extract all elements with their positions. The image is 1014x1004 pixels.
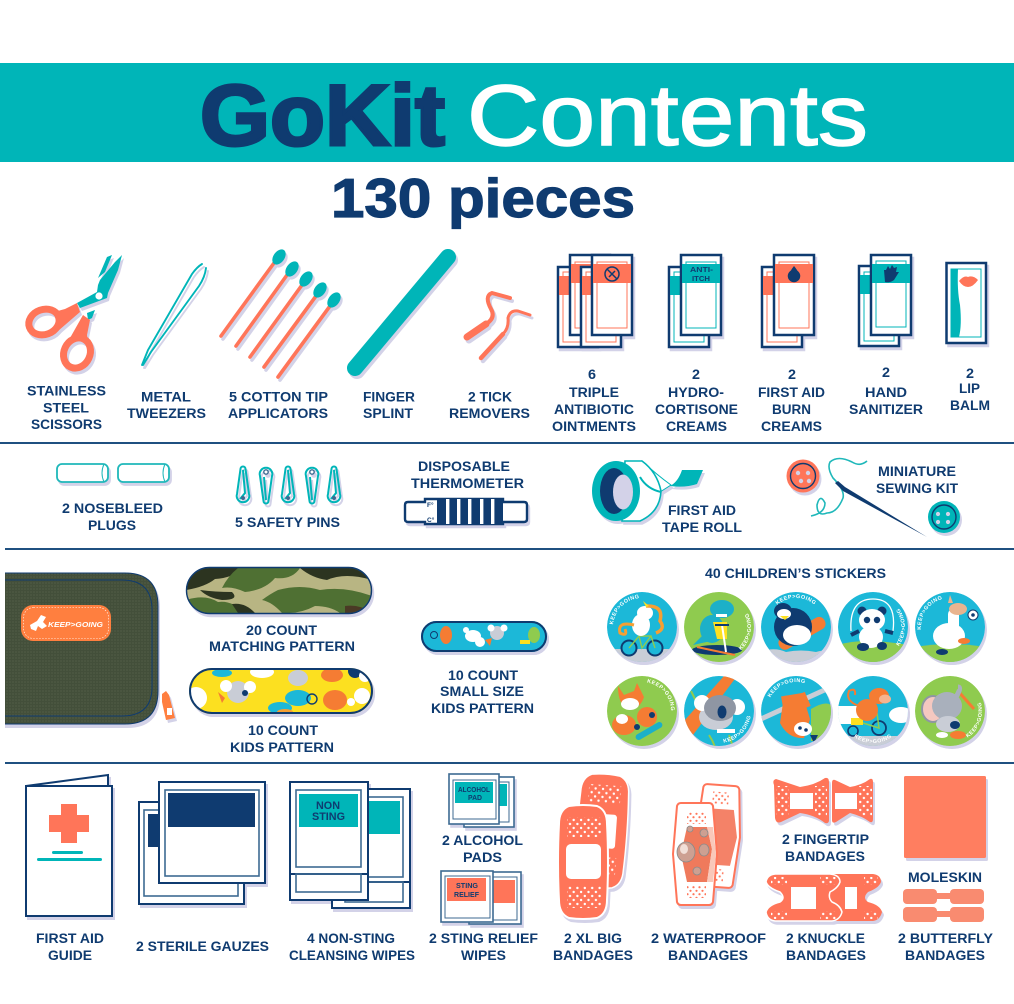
label: stainless steel scissors: STAINLESS: [27, 384, 106, 398]
label: first aid tape roll: FIRST AID: [668, 503, 736, 518]
label: nosebleed plugs: [62, 501, 163, 533]
label: miniature sewing kit: SEWING KIT: [876, 481, 959, 496]
label: triple antibiotic ointments: TRIPLE: [569, 385, 619, 400]
label: first aid burn creams: BURN: [772, 402, 811, 417]
label: matching pattern: [209, 623, 355, 654]
label: kids pattern: KIDS PATTERN: [230, 740, 334, 755]
label: sting relief wipes: WIPES: [461, 948, 506, 963]
label: lip balm: LIP: [959, 381, 980, 396]
panel: zippered kit bag: [5, 573, 175, 728]
icon: non-sting cleansing wipes: STING: [312, 811, 345, 823]
icon: finger splint: [355, 257, 448, 368]
icon: non-sting cleansing wipes: NON: [316, 800, 340, 812]
label: butterfly bandages: 2 BUTTERFLY: [898, 931, 993, 946]
label: finger splint: [363, 390, 415, 421]
label: disposable thermometer: DISPOSABLE: [418, 459, 510, 474]
label: stainless steel scissors: SCISSORS: [31, 417, 102, 432]
label: disposable thermometer: THERMOMETER: [411, 476, 524, 491]
section dividers: [0, 443, 1014, 763]
icon: first aid guide: [26, 775, 112, 916]
icon: miniature sewing kit: [786, 458, 960, 537]
sticker: elephant: [915, 676, 987, 749]
label: kids pattern: [230, 723, 334, 755]
label: triple antibiotic ointments: OINTMENTS: [552, 419, 636, 434]
icon: hydrocortisone cream packets: ANTI-: [690, 265, 714, 274]
label: triple antibiotic ointments: ANTIBIOTIC: [554, 402, 634, 417]
icon: cotton tip applicators: [221, 247, 343, 377]
label: xl big bandages: [553, 931, 633, 963]
icon: moleskin sheet: [904, 776, 986, 858]
sticker: unicorn on bike: KEEP>GOING: [609, 594, 639, 624]
icon: kids pattern bandage: [185, 664, 373, 715]
icon: safety pins: [237, 466, 340, 504]
label: finger splint: FINGER: [363, 390, 415, 404]
label: small size kids pattern: SMALL SIZE: [440, 684, 524, 699]
sticker: llama with soccer ball: KEEP>GOING: [917, 596, 942, 630]
label: first aid guide: FIRST AID: [36, 931, 104, 946]
sticker: panda with jump rope: KEEP>GOING: [896, 608, 905, 646]
label: waterproof bandages: BANDAGES: [668, 948, 748, 963]
icon: thermometer: [405, 499, 527, 524]
icon: thermometer: F°: [427, 501, 434, 509]
label: first aid burn creams: 2: [788, 367, 796, 382]
label: xl big bandages: 2 XL BIG: [564, 931, 622, 946]
label: triple antibiotic ointments: [552, 367, 636, 434]
icon: knuckle bandages: [766, 874, 882, 921]
icon: nosebleed plugs: [57, 464, 169, 482]
label: hydrocortisone creams: HYDRO-: [668, 385, 724, 400]
bag logo patch: [21, 605, 111, 641]
icon: sterile gauzes: [139, 782, 265, 904]
label: alcohol pads: PADS: [463, 850, 502, 865]
label: miniature sewing kit: [876, 464, 959, 496]
label: lip balm: 2: [966, 366, 974, 381]
label: matching pattern: MATCHING PATTERN: [209, 639, 355, 654]
label: lip balm: [950, 366, 990, 413]
title band: GoKit: [200, 68, 445, 164]
icon: alcohol pads: PAD: [468, 795, 482, 802]
label: kids pattern: 10 COUNT: [248, 723, 319, 738]
icon: scissors: [25, 255, 122, 373]
icon: butterfly bandages: [903, 889, 984, 922]
icon: lip balm packet: [946, 263, 986, 343]
label: knuckle bandages: [786, 931, 866, 963]
icon: hydrocortisone cream packets: [669, 255, 721, 347]
icon: camo pattern bandage: [186, 567, 372, 614]
label: finger splint: SPLINT: [363, 406, 414, 421]
sticker: fox on skateboard: [607, 676, 679, 749]
sticker: elephant: KEEP>GOING: [966, 702, 982, 738]
label: hydrocortisone creams: [655, 367, 738, 434]
label: small size kids pattern: [431, 668, 534, 716]
bag logo patch: KEEP>GOING: [48, 620, 103, 629]
label: first aid burn creams: [758, 367, 825, 434]
label: matching pattern: 20 COUNT: [246, 623, 318, 638]
label: hand sanitizer: HAND: [865, 385, 907, 400]
icon: small kids pattern bandage: [421, 621, 547, 652]
sticker: llama with soccer ball: [915, 592, 987, 665]
label: triple antibiotic ointments: 6: [588, 367, 597, 382]
sticker: fox on skateboard: KEEP>GOING: [647, 678, 675, 710]
label: small size kids pattern: 10 COUNT: [448, 668, 519, 683]
icon: hydrocortisone cream packets: ITCH: [692, 274, 710, 283]
icon: thermometer: C°: [427, 516, 435, 524]
label: waterproof bandages: [651, 931, 766, 963]
icon: alcohol pads: ALCOHOL: [458, 787, 491, 794]
label: non-sting cleansing wipes: [289, 931, 415, 963]
sticker: unicorn on bike: [607, 592, 679, 665]
icon: hand sanitizer packets: [859, 255, 911, 346]
label: first aid guide: [36, 931, 104, 963]
label: cotton tip applicators: APPLICATORS: [228, 406, 328, 421]
label: lip balm: BALM: [950, 398, 990, 413]
sticker: koala on branch: KEEP>GOING: [723, 716, 750, 743]
label: metal tweezers: TWEEZERS: [127, 406, 206, 421]
label: tick removers: 2 TICK: [468, 390, 512, 404]
sticker: sloth hanging on branch: [761, 676, 833, 749]
label: disposable thermometer: [411, 459, 524, 491]
label: small size kids pattern: KIDS PATTERN: [431, 701, 534, 716]
label: sting relief wipes: [429, 931, 538, 963]
sticker: monkey on bike: [838, 676, 910, 749]
icon: first aid tape roll: [592, 461, 703, 521]
sticker: penguin on snowboard: [761, 592, 833, 665]
sticker: sloth hanging on branch: KEEP>GOING: [767, 678, 805, 698]
icon: metal tweezers: [142, 264, 206, 365]
label: hand sanitizer: 2: [882, 365, 890, 380]
icon: tick removers: [467, 293, 530, 358]
sticker: monkey on bike: KEEP>GOING: [854, 734, 891, 743]
label: cotton tip applicators: [228, 390, 328, 421]
label: stainless steel scissors: [27, 384, 106, 432]
label: first aid guide: GUIDE: [48, 948, 92, 963]
label: fingertip bandages: 2 FINGERTIP: [782, 832, 869, 847]
sticker: koala on branch: [684, 676, 756, 749]
sticker: panda with jump rope: [838, 592, 910, 665]
icon: fingertip bandages: [773, 778, 873, 823]
label: stainless steel scissors: STEEL: [43, 400, 89, 416]
label: alcohol pads: 2 ALCOHOL: [442, 833, 523, 848]
label: tick removers: [449, 390, 530, 421]
icon: waterproof bandages: [673, 784, 744, 905]
icon: first aid burn cream packets: [762, 255, 814, 347]
label: miniature sewing kit: MINIATURE: [878, 464, 956, 479]
label: first aid tape roll: TAPE ROLL: [662, 520, 742, 535]
icon: sting relief wipes: STING: [456, 883, 479, 890]
label: metal tweezers: METAL: [141, 390, 191, 404]
label: cotton tip applicators: 5 COTTON TIP: [229, 390, 328, 404]
label: hydrocortisone creams: 2: [692, 367, 700, 382]
label: first aid tape roll: [662, 503, 742, 535]
label: butterfly bandages: [898, 931, 993, 963]
label: alcohol pads: [442, 833, 523, 865]
icon: alcohol pads: [449, 774, 514, 827]
label: nosebleed plugs: PLUGS: [88, 518, 136, 533]
label: fingertip bandages: [782, 832, 869, 864]
label: sting relief wipes: 2 STING RELIEF: [429, 931, 538, 946]
label: sterile gauzes: 2 STERILE GAUZES: [136, 939, 269, 954]
label: metal tweezers: [127, 390, 206, 421]
label: tick removers: REMOVERS: [449, 406, 530, 421]
label: children's stickers: 40 CHILDREN’S STICKERS: [705, 566, 886, 581]
label: hand sanitizer: SANITIZER: [849, 402, 923, 417]
label: non-sting cleansing wipes: 4 NON-STING: [307, 931, 395, 946]
label: first aid burn creams: CREAMS: [761, 419, 822, 434]
label: first aid burn creams: FIRST AID: [758, 385, 825, 400]
subtitle: piece count: 130 pieces: [331, 167, 635, 229]
sticker: t-rex on scooter: KEEP>GOING: [738, 614, 752, 650]
label: hand sanitizer: [849, 365, 923, 417]
label: waterproof bandages: 2 WATERPROOF: [651, 931, 766, 946]
bag zipper pull: [162, 691, 175, 720]
icon: sting relief wipes: RELIEF: [454, 892, 480, 899]
label: safety pins: 5 SAFETY PINS: [235, 515, 340, 530]
label: xl big bandages: BANDAGES: [553, 948, 633, 963]
sticker: t-rex on scooter: [684, 592, 756, 665]
label: butterfly bandages: BANDAGES: [905, 948, 985, 963]
title band: Contents: [467, 68, 868, 164]
icon: triple antibiotic ointment packets: [558, 255, 632, 347]
label: hydrocortisone creams: CORTISONE: [655, 402, 738, 417]
icon: sting relief wipes: [441, 871, 521, 924]
label: moleskin: MOLESKIN: [908, 870, 982, 885]
icon: non-sting cleansing wipes: [290, 782, 410, 908]
icon: xl big bandages: [558, 772, 631, 919]
label: nosebleed plugs: 2 NOSEBLEED: [62, 501, 163, 516]
title band: [0, 63, 1014, 164]
label: hydrocortisone creams: CREAMS: [666, 419, 727, 434]
label: fingertip bandages: BANDAGES: [785, 849, 865, 864]
label: knuckle bandages: BANDAGES: [786, 948, 866, 963]
label: non-sting cleansing wipes: CLEANSING WIPES: [289, 948, 415, 963]
label: knuckle bandages: 2 KNUCKLE: [786, 931, 865, 946]
sticker: penguin on snowboard: KEEP>GOING: [775, 594, 816, 605]
